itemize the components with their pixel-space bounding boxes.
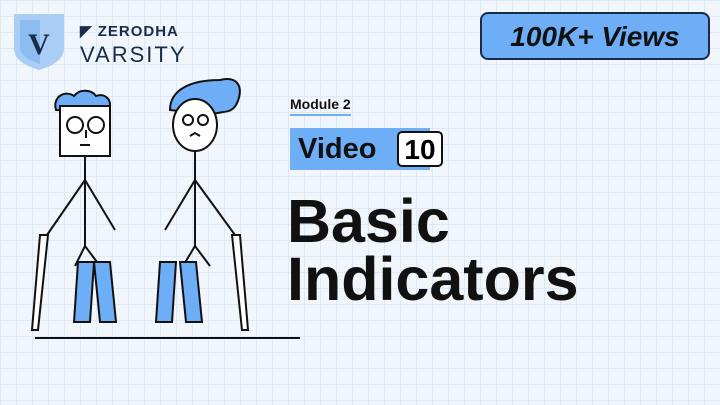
right figure — [156, 79, 248, 330]
number box: 10 — [404, 134, 436, 165]
module label: Module 2 — [290, 96, 351, 112]
icon: shield — [14, 14, 64, 70]
illustration: two cricketers — [30, 78, 300, 339]
title: Indicators — [287, 245, 579, 313]
badge: views — [480, 12, 710, 60]
number box — [397, 131, 443, 167]
video label — [290, 128, 430, 170]
title — [287, 187, 579, 313]
icon: shield: V — [28, 28, 50, 61]
brand text: ◤ ZERODHA — [80, 23, 179, 40]
left figure — [32, 91, 116, 330]
video label: Video — [298, 133, 376, 165]
badge: views: 100K+ Views — [510, 21, 680, 52]
logo — [14, 14, 187, 70]
title: Basic — [287, 187, 450, 255]
logo: VARSITY — [80, 42, 187, 67]
